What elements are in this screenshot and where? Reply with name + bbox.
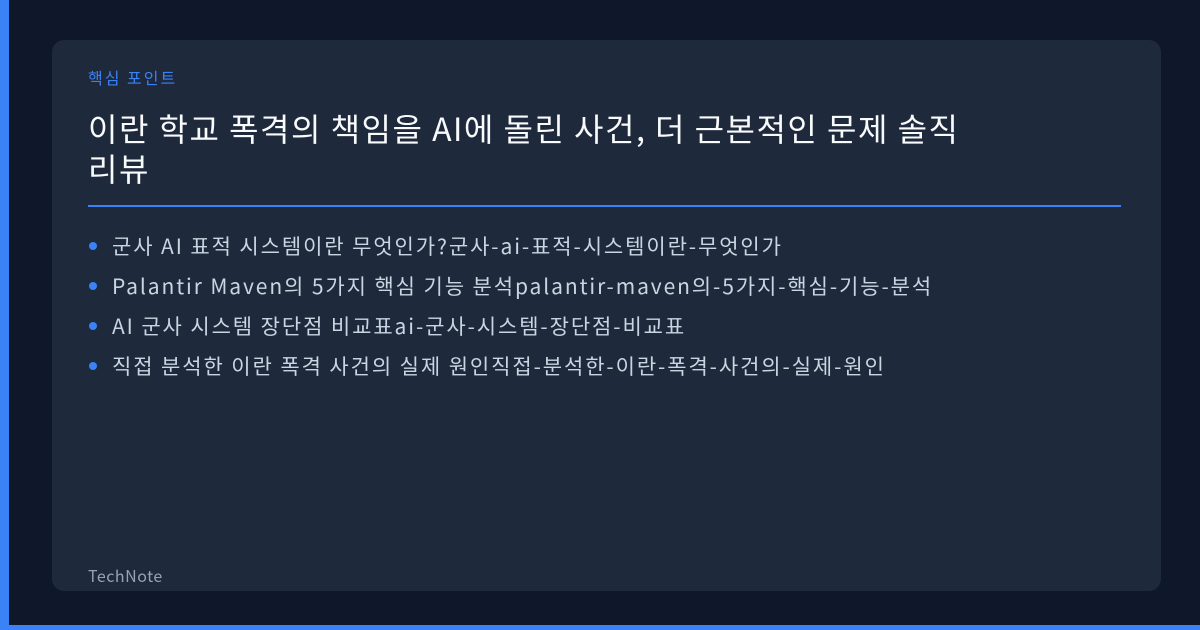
title: 리뷰	[88, 145, 150, 191]
bullet list	[89, 231, 933, 381]
kicker: 핵심 포인트	[88, 65, 177, 89]
footer: TechNote	[88, 563, 163, 587]
bullet list: Palantir Maven의 5가지 핵심 기능 분석palantir-maven의-5가지-핵심-기능-분석	[112, 271, 933, 301]
bullet list: AI 군사 시스템 장단점 비교표ai-군사-시스템-장단점-비교표	[112, 311, 686, 341]
title	[88, 105, 959, 191]
bullet list: 직접 분석한 이란 폭격 사건의 실제 원인직접-분석한-이란-폭격-사건의-실제-원인	[112, 351, 886, 381]
bullet list: 군사 AI 표적 시스템이란 무엇인가?군사-ai-표적-시스템이란-무엇인가	[112, 231, 783, 261]
title: 이란 학교 폭격의 책임을 AI에 돌린 사건, 더 근본적인 문제 솔직	[88, 105, 959, 151]
